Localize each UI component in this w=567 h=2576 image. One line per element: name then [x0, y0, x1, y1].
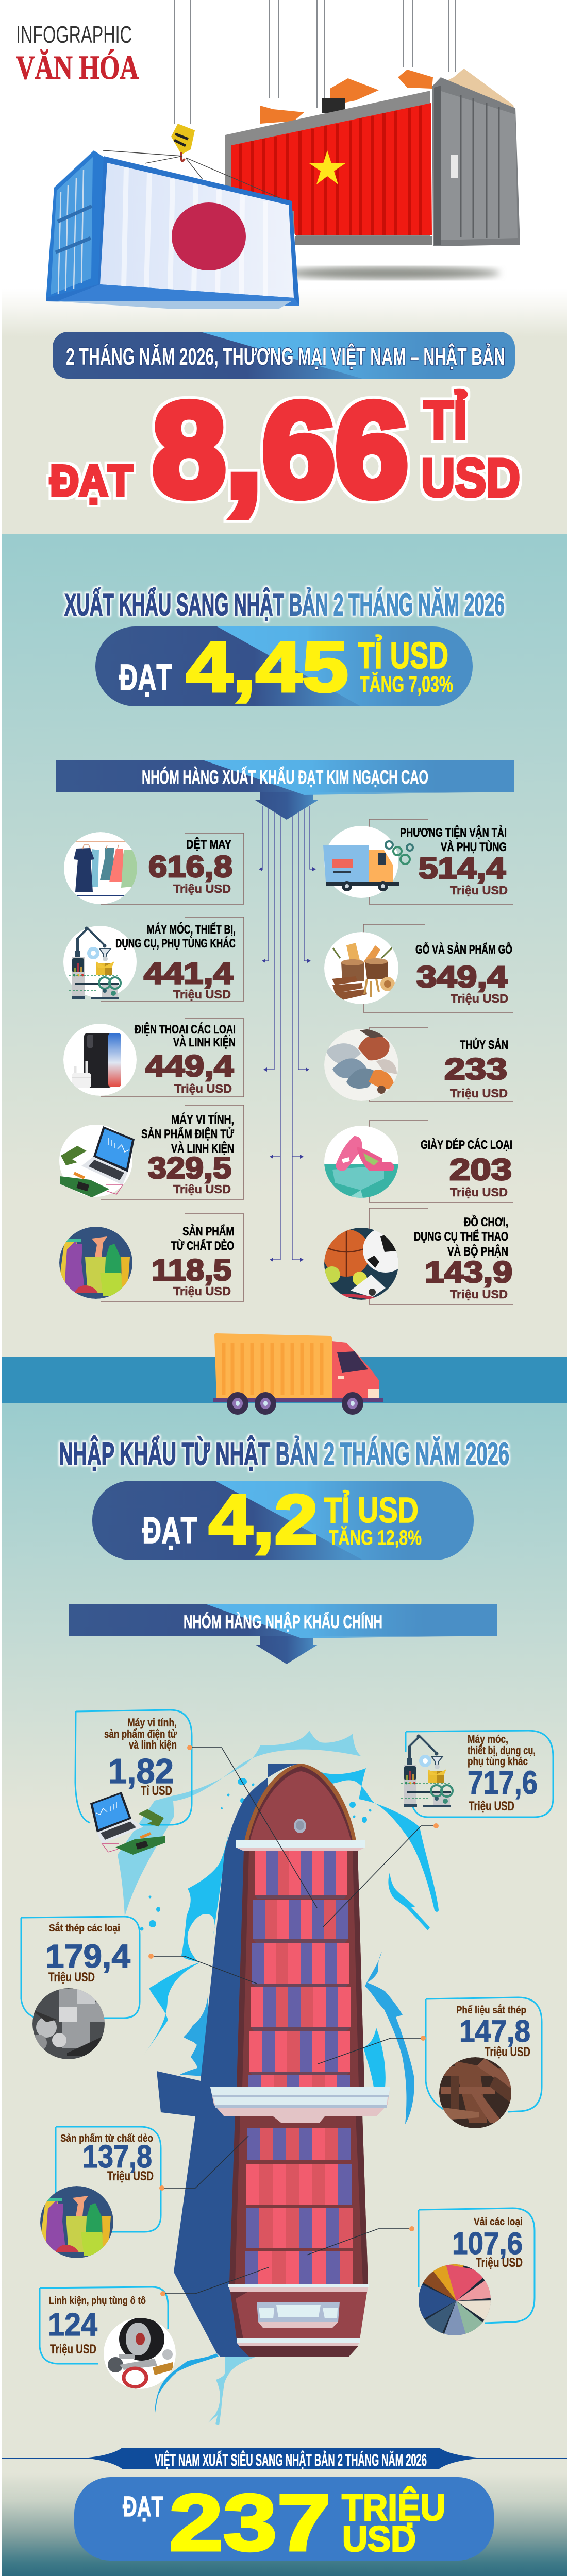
- icon: scrap metal: [439, 2057, 515, 2128]
- item: Máy vi tính 329,5: [59, 1105, 244, 1199]
- item: Sản phẩm từ chất dẻo 118,5: 118,5: [152, 1253, 231, 1287]
- big figure: 8,66 tỉ USD: ĐẠT: [50, 456, 132, 505]
- callout: Máy vi tính 1,82 tỉ USD: Máy vi tính,: [127, 1716, 177, 1729]
- containers aft: [245, 2128, 353, 2284]
- item: Máy vi tính 329,5: SẢN PHẨM ĐIỆN TỬ: [141, 1126, 234, 1141]
- logo: Infographic Văn Hóa: [16, 21, 139, 87]
- rear hull: [229, 2114, 368, 2284]
- item: Dệt may 616,8: 616,8: [148, 850, 232, 884]
- callout: Phế liệu sắt thép 147,8: [318, 1997, 542, 2128]
- pill: export value: [95, 626, 473, 707]
- item: Thủy sản 233: THỦY SẢN: [460, 1037, 508, 1052]
- illustration: hanging containers with flags: [46, 0, 520, 309]
- banner: import groups: NHÓM HÀNG NHẬP KHẨU CHÍNH: [184, 1612, 382, 1632]
- callout: Sắt thép 179,4: Triệu USD: [48, 1970, 95, 1985]
- callout: Máy vi tính 1,82 tỉ USD: 1,82: [108, 1752, 174, 1791]
- icon: sport balls: [324, 1228, 398, 1300]
- icon: fabric swatches: [418, 2264, 495, 2336]
- pill: import value: [92, 1480, 474, 1560]
- item: Thủy sản 233: Triệu USD: [450, 1087, 508, 1100]
- callout: Phế liệu sắt thép 147,8: Phế liệu sắt thép: [456, 2004, 526, 2016]
- big figure: 8,66 tỉ USD: USD: [421, 448, 520, 508]
- item: Máy vi tính 329,5: 329,5: [148, 1151, 231, 1185]
- cargo ship illustration: [157, 1764, 390, 2357]
- item: Phương tiện vận tải 514,4: VÀ PHỤ TÙNG: [441, 840, 507, 854]
- pill: export value: 4,45: [186, 628, 348, 707]
- item: Máy móc 441,4: Triệu USD: [173, 988, 231, 1001]
- item: Gỗ 349,4: GỖ VÀ SẢN PHẨM GỖ: [415, 942, 512, 957]
- section background: header: [0, 0, 567, 534]
- callout: Máy móc 717,6 triệu USD: 717,6: [468, 1764, 538, 1801]
- ship shadow: [157, 1764, 300, 2357]
- connector lines: [259, 806, 316, 1262]
- callout: Máy vi tính 1,82 tỉ USD: [75, 1710, 317, 1908]
- big figure: 8,66 tỉ USD: 8,66: [153, 375, 408, 524]
- callout: Máy móc 717,6 triệu USD: [323, 1731, 553, 1927]
- stern: [228, 2284, 369, 2357]
- item: Sản phẩm từ chất dẻo 118,5: Triệu USD: [173, 1284, 231, 1298]
- item: Đồ chơi, dụng cụ thể thao 143,9: ĐỒ CHƠI,: [464, 1215, 508, 1229]
- callout: Sắt thép 179,4: Sắt thép các loại: [49, 1922, 120, 1934]
- shadow of Vietnam container: [284, 267, 500, 279]
- item: Gỗ 349,4: 349,4: [416, 960, 507, 994]
- item: Máy móc 441,4: MÁY MÓC, THIẾT BỊ,: [147, 922, 236, 937]
- icon: plastic products: [59, 1227, 132, 1299]
- icon: plastic products: [40, 2186, 113, 2258]
- item: Máy vi tính 329,5: VÀ LINH KIỆN: [171, 1141, 234, 1156]
- pill: surplus value: 237: [169, 2478, 331, 2568]
- callout: Sắt thép 179,4: [21, 1917, 257, 2059]
- callout: Vải các loại 107,6: [307, 2208, 535, 2336]
- pill: import value: ĐẠT: [142, 1510, 197, 1551]
- icon: seafood: [324, 1028, 398, 1101]
- item: Gỗ 349,4: [324, 924, 513, 1012]
- item: Giày dép 203: [324, 1121, 513, 1202]
- item: Máy móc 441,4: 441,4: [144, 957, 233, 990]
- item: Sản phẩm từ chất dẻo 118,5: TỪ CHẤT DẺO: [171, 1238, 234, 1253]
- item: Phương tiện vận tải 514,4: [323, 819, 513, 904]
- callout: Máy móc 717,6 triệu USD: Triệu USD: [469, 1799, 514, 1814]
- icon: clothes: [64, 832, 137, 904]
- pill: surplus value: USD: [342, 2519, 416, 2559]
- icon: phone and earbuds: [63, 1024, 137, 1096]
- item: Điện thoại 449,4: 449,4: [145, 1049, 234, 1083]
- callout: Vải các loại 107,6: Triệu USD: [476, 2256, 523, 2270]
- section background: imports: [0, 1403, 567, 1918]
- item: Giày dép 203: Triệu USD: [450, 1185, 508, 1199]
- item: Phương tiện vận tải 514,4: Triệu USD: [450, 884, 508, 897]
- pill: import value: 4,2: [209, 1480, 318, 1558]
- item: Phương tiện vận tải 514,4: 514,4: [419, 852, 506, 885]
- icon: shoes: [324, 1126, 398, 1200]
- big figure: 8,66 tỉ USD: TỈ: [424, 390, 467, 450]
- callout: Linh kiện, phụ tùng ô tô 124: Linh kiện, phụ tùng ô tô: [49, 2295, 146, 2307]
- callout: Máy móc 717,6 triệu USD: Máy móc,: [468, 1733, 508, 1745]
- logo: Infographic Văn Hóa: VĂN HÓA: [16, 49, 139, 87]
- callout: Phế liệu sắt thép 147,8: 147,8: [459, 2014, 530, 2048]
- Japan container: [46, 150, 299, 309]
- item: Đồ chơi, dụng cụ thể thao 143,9: DỤNG CỤ THỂ THAO: [414, 1229, 508, 1244]
- item: Đồ chơi, dụng cụ thể thao 143,9: 143,9: [425, 1256, 512, 1289]
- item: Sản phẩm từ chất dẻo 118,5: SẢN PHẨM: [182, 1224, 234, 1239]
- pill: import value: TỈ USD: [324, 1490, 419, 1530]
- callout: Sản phẩm từ chất dẻo 137,8: 137,8: [82, 2139, 152, 2175]
- pill: headline: [53, 332, 515, 379]
- callout: Sản phẩm từ chất dẻo 137,8: Sản phẩm từ chất dẻo: [60, 2133, 153, 2144]
- item: Thủy sản 233: [324, 1028, 513, 1101]
- pill: surplus value: ĐẠT: [123, 2490, 163, 2522]
- callout: Máy móc 717,6 triệu USD: phụ tùng khác: [468, 1755, 528, 1768]
- pill: export value: ĐẠT: [119, 657, 172, 698]
- icon: truck divider: [213, 1333, 383, 1415]
- item: Dệt may 616,8: Triệu USD: [173, 882, 231, 895]
- item: Máy móc 441,4: DỤNG CỤ, PHỤ TÙNG KHÁC: [115, 936, 236, 951]
- item: Máy vi tính 329,5: MÁY VI TÍNH,: [171, 1112, 234, 1127]
- callout: Máy vi tính 1,82 tỉ USD: Tỉ USD: [141, 1784, 172, 1798]
- item: Gỗ 349,4: Triệu USD: [451, 992, 508, 1005]
- banner: export groups: [56, 760, 514, 820]
- big figure: 8,66 tỉ USD: [50, 375, 520, 524]
- callout: Máy vi tính 1,82 tỉ USD: sản phẩm điện tử: [104, 1727, 177, 1740]
- crane hook: [103, 124, 286, 200]
- item: Đồ chơi, dụng cụ thể thao 143,9: [323, 1208, 513, 1304]
- icon: machinery: [63, 926, 137, 999]
- callout: Máy móc 717,6 triệu USD: thiết bị, dụng cụ,: [468, 1744, 536, 1757]
- droplets: [140, 1778, 371, 1931]
- callout: Sản phẩm từ chất dẻo 137,8: Triệu USD: [107, 2169, 154, 2183]
- pill: export value: TỈ USD: [358, 635, 448, 676]
- icon: machinery: [401, 1734, 453, 1807]
- ribbon: trade surplus: [0, 2448, 567, 2469]
- item: Thủy sản 233: 233: [444, 1053, 507, 1086]
- Vietnam container: [225, 69, 520, 246]
- item: Sản phẩm từ chất dẻo 118,5: [59, 1214, 244, 1301]
- band: blue road: [2, 1357, 567, 1403]
- icon: laptop: [90, 1792, 165, 1855]
- fore hull: [237, 1851, 364, 2088]
- callout: Linh kiện, phụ tùng ô tô 124: 124: [48, 2307, 97, 2343]
- item: Đồ chơi, dụng cụ thể thao 143,9: VÀ BỘ PHẬN: [447, 1244, 508, 1259]
- icon: steel bars: [30, 1988, 106, 2059]
- containers forward: [248, 1851, 351, 2087]
- item: Điện thoại 449,4: ĐIỆN THOẠI CÁC LOẠI: [135, 1022, 236, 1037]
- bridge: [210, 2087, 390, 2123]
- item: Máy móc 441,4: [63, 917, 244, 1001]
- icon: truck: [323, 826, 413, 898]
- item: Đồ chơi, dụng cụ thể thao 143,9: Triệu USD: [450, 1287, 508, 1301]
- callout: Vải các loại 107,6: 107,6: [452, 2226, 523, 2261]
- item: Dệt may 616,8: DỆT MAY: [186, 837, 231, 852]
- section background: ship area: [0, 1814, 567, 2494]
- icon: laptop and circuit: [59, 1125, 135, 1197]
- water splashes: [118, 1731, 439, 2425]
- pill: import value: TĂNG 12,8%: [329, 1526, 422, 1549]
- item: Giày dép 203: GIÀY DÉP CÁC LOẠI: [421, 1138, 512, 1152]
- callout: Linh kiện, phụ tùng ô tô 124: Triệu USD: [50, 2342, 96, 2357]
- callout: Linh kiện, phụ tùng ô tô 124: [40, 2267, 269, 2389]
- item: Điện thoại 449,4: Triệu USD: [174, 1082, 232, 1095]
- item: Điện thoại 449,4: [63, 1019, 244, 1097]
- logo: Infographic Văn Hóa: INFOGRAPHIC: [16, 21, 132, 48]
- callout: Máy vi tính 1,82 tỉ USD: và linh kiện: [129, 1738, 177, 1751]
- item: Điện thoại 449,4: VÀ LINH KIỆN: [173, 1035, 236, 1049]
- item: Dệt may 616,8: [64, 832, 244, 904]
- ocean photo with container ship: [0, 2473, 567, 2576]
- pill: surplus value: [74, 2477, 494, 2568]
- pill: export value: TĂNG 7,03%: [360, 671, 453, 697]
- callout: Vải các loại 107,6: Vải các loại: [474, 2216, 523, 2228]
- icon: timber: [324, 932, 398, 1004]
- cables: [175, 0, 456, 124]
- item: Phương tiện vận tải 514,4: PHƯƠNG TIỆN VẬN TẢI: [400, 825, 507, 840]
- callout: Sắt thép 179,4: 179,4: [45, 1938, 130, 1975]
- callout: Phế liệu sắt thép 147,8: Triệu USD: [485, 2045, 530, 2059]
- item: Giày dép 203: 203: [449, 1153, 512, 1187]
- pill: surplus value: TRIỆU: [342, 2487, 445, 2529]
- item: Máy vi tính 329,5: Triệu USD: [173, 1182, 231, 1196]
- callout: Sản phẩm từ chất dẻo 137,8: [40, 2127, 248, 2258]
- banner: import groups: [69, 1604, 497, 1664]
- section background: exports: [0, 534, 567, 1359]
- icon: car parts: [104, 2317, 176, 2389]
- bow: [244, 1764, 356, 1841]
